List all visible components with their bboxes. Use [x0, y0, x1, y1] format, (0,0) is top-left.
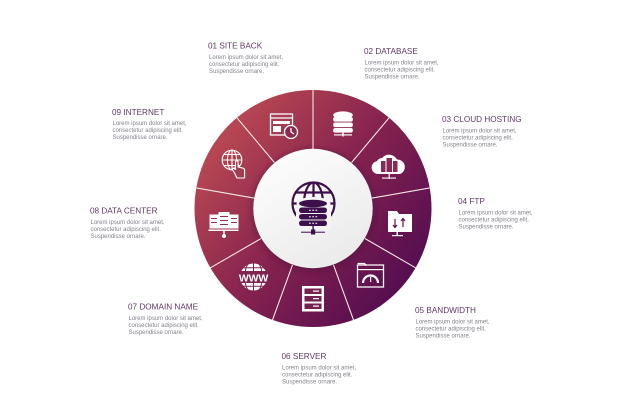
ring segments [194, 90, 432, 327]
text: 08 data center: Lorem ipsum dolor sit amet, [90, 220, 165, 226]
text: 08 data center: Suspendisse ornare. [90, 234, 146, 240]
text: 05 bandwidth: Lorem ipsum dolor sit amet, [416, 320, 490, 326]
text: 09 internet: 09 INTERNET [112, 108, 164, 117]
text: 01 site back: Lorem ipsum dolor sit amet, [209, 55, 283, 61]
text: 03 cloud hosting: Suspendisse ornare. [442, 143, 498, 149]
icon: central globe with database [292, 182, 334, 234]
database stack [296, 197, 331, 234]
text: 07 domain name: Suspendisse ornare. [128, 330, 184, 336]
text: 07 domain name: Lorem ipsum dolor sit amet, [128, 316, 203, 322]
text: 04 ftp: Lorem ipsum dolor sit amet, [458, 210, 533, 216]
text: 04 ftp: Suspendisse ornare. [458, 225, 514, 231]
text: 01 site back [208, 42, 283, 75]
text: 01 site back: Suspendisse ornare. [209, 69, 264, 75]
center circle [253, 149, 373, 268]
text: 04 ftp: 04 FTP [458, 197, 485, 206]
text: 03 cloud hosting [442, 115, 522, 149]
text: 06 server: Lorem ipsum dolor sit amet, [282, 366, 356, 372]
icon: server rack [302, 286, 324, 312]
text: 06 server [282, 352, 356, 386]
text: 04 ftp: consectetur adipiscing elit. [458, 218, 529, 224]
text: 07 domain name: 07 DOMAIN NAME [128, 302, 199, 312]
text: 09 internet: Suspendisse ornare. [112, 135, 168, 141]
segment dividers [196, 90, 430, 320]
text: 02 database [364, 47, 439, 81]
text: 05 bandwidth [415, 306, 490, 340]
text: 09 internet [112, 108, 187, 141]
text: 05 bandwidth: Suspendisse ornare. [416, 334, 471, 340]
icon: database [333, 111, 353, 136]
text: 08 data center [90, 206, 165, 240]
text: 02 database: consectetur adipiscing elit. [364, 68, 435, 74]
text: 08 data center: 08 DATA CENTER [90, 206, 158, 216]
icon: site back window and clock [270, 114, 298, 138]
text: 06 server: Suspendisse ornare. [282, 380, 337, 386]
text: 03 cloud hosting: 03 CLOUD HOSTING [442, 115, 522, 124]
text: 03 cloud hosting: consectetur adipiscing elit. [442, 136, 513, 142]
text: 01 site back: consectetur adipiscing elit. [209, 62, 280, 68]
icon: bandwidth window with gauge [358, 264, 384, 287]
icon: www globe [239, 264, 268, 290]
text: 02 database: Lorem ipsum dolor sit amet, [364, 60, 439, 66]
text: 01 site back: 01 SITE BACK [208, 42, 263, 50]
icon: cloud hosting [372, 155, 405, 179]
text: 02 database: 02 DATABASE [364, 47, 418, 56]
text: 06 server: 06 SERVER [282, 352, 326, 361]
text: 06 server: consectetur adipiscing elit. [282, 372, 353, 378]
icon: data center [208, 212, 238, 238]
text: 09 internet: Lorem ipsum dolor sit amet, [112, 121, 187, 127]
icon: internet globe with cursor hand [222, 150, 245, 178]
center shadow [251, 148, 375, 272]
icon: ftp folder [388, 211, 412, 236]
text: 09 internet: consectetur adipiscing elit. [112, 128, 183, 134]
donut chart [194, 90, 432, 327]
text: 05 bandwidth: 05 BANDWIDTH [415, 306, 476, 315]
text: 03 cloud hosting: Lorem ipsum dolor sit amet, [442, 128, 517, 134]
text: 08 data center: consectetur adipiscing elit. [90, 227, 161, 233]
text: 02 database: Suspendisse ornare. [364, 75, 420, 81]
text: 04 ftp [458, 197, 533, 231]
text: 07 domain name: consectetur adipiscing elit. [128, 323, 199, 329]
icon: www globe: WWW [239, 272, 268, 284]
text: 05 bandwidth: consectetur adipiscing elit. [416, 326, 486, 332]
text: 07 domain name [128, 302, 203, 336]
